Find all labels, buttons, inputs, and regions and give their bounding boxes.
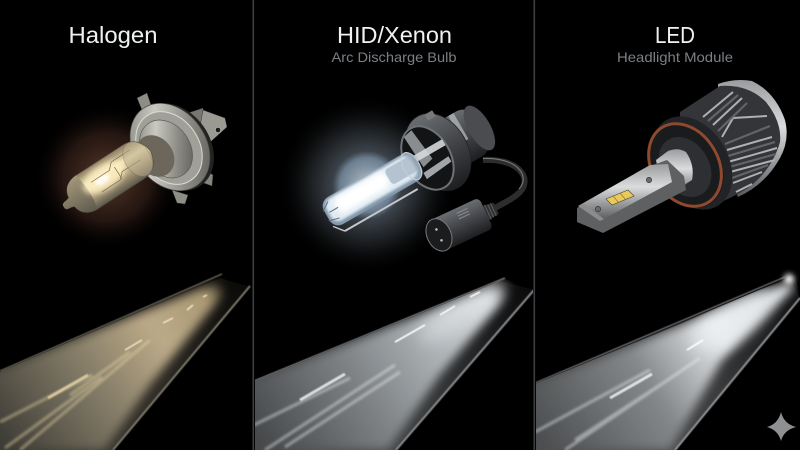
heading: HID/Xenon: HID/Xenon bbox=[337, 22, 452, 48]
subtitle: Arc Discharge Bulb: Arc Discharge Bulb bbox=[332, 49, 457, 65]
neck bbox=[656, 149, 693, 184]
fins bbox=[703, 92, 777, 192]
LED chip bbox=[606, 190, 634, 205]
road: LED beam bbox=[520, 274, 800, 450]
subtitle: Headlight Module: Headlight Module bbox=[617, 49, 733, 65]
road: halogen beam bbox=[0, 274, 250, 450]
panel: LED bbox=[520, 22, 800, 450]
heading: Halogen: Halogen bbox=[68, 22, 158, 48]
O-ring bbox=[657, 116, 732, 210]
icon: LED module bbox=[577, 80, 787, 233]
silver rim bbox=[718, 80, 787, 197]
icon: sparkle watermark bbox=[767, 412, 796, 441]
icon: halogen bulb bbox=[47, 92, 228, 237]
dark heat sink bbox=[680, 86, 780, 204]
panel: halogen bbox=[0, 22, 250, 450]
road: xenon beam bbox=[255, 277, 533, 450]
panel: HID/Xenon bbox=[240, 22, 534, 450]
board bbox=[577, 160, 686, 233]
icon: xenon bulb bbox=[294, 106, 528, 258]
heading: LED: LED bbox=[655, 22, 695, 48]
